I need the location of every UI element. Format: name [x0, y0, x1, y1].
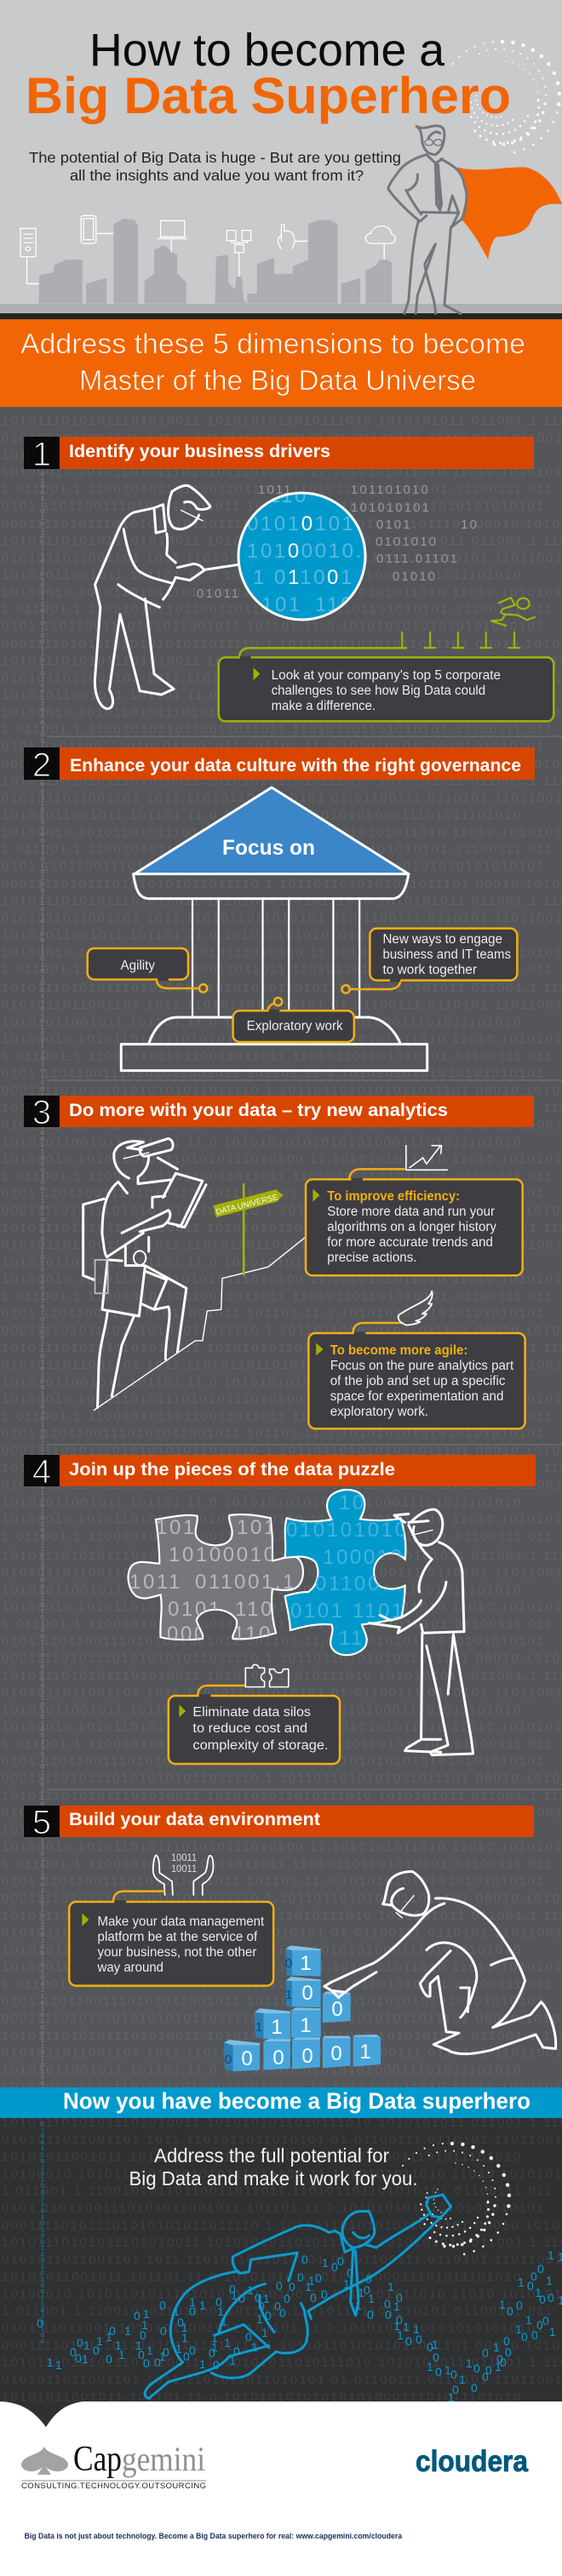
closing text: Big Data and make it work for you. — [129, 2167, 417, 2190]
binary data texture: 0101010 — [376, 535, 438, 549]
binary data texture: 01011 — [197, 587, 240, 601]
callout: improve efficiency — [306, 1146, 523, 1275]
callout: top 5 challenges — [219, 648, 553, 721]
callout: become more agile: exploratory work. — [330, 1405, 428, 1419]
callout: exploratory work: Exploratory work — [247, 1019, 343, 1033]
data blocks: 1 — [271, 2016, 283, 2039]
icon: data spiral at fist — [403, 2144, 509, 2255]
callout: become more agile: space for experimentation and — [330, 1389, 503, 1404]
callout: new ways to engage — [342, 929, 517, 993]
puzzle piece: grey: 011001.1 — [195, 1571, 296, 1594]
section 3 heading: Do more with your data – try new analytics — [69, 1101, 448, 1120]
section 5 heading: 5 — [32, 1804, 51, 1841]
puzzle piece: blue: 10 — [339, 1491, 366, 1514]
callout: become more agile — [308, 1291, 525, 1428]
temple diagram — [121, 787, 427, 1071]
binary data texture: 1011 — [258, 483, 293, 497]
callout: agility — [88, 948, 207, 993]
puzzle piece: grey: 1011 — [129, 1571, 182, 1594]
section 2 heading: Enhance your data culture with the right governance — [70, 756, 521, 776]
icon: hands with data — [153, 1852, 213, 1895]
intro text: The potential of Big Data is huge - But are you getting — [29, 149, 401, 166]
callout: become more agile: of the job and set up a specific — [330, 1374, 506, 1388]
logo: Cloudera: cloudera — [416, 2445, 528, 2478]
binary data texture — [0, 407, 562, 2087]
section 3 heading: 3 — [32, 1094, 51, 1131]
data blocks: 0 — [301, 2045, 313, 2068]
figure: man with magnifying glass — [95, 485, 238, 709]
data blocks: 1 — [359, 2041, 371, 2064]
section 2 heading — [24, 747, 535, 784]
data blocks: 0 — [331, 1998, 343, 2021]
puzzle piece: grey: 000 — [167, 1623, 208, 1646]
figure: hiker with binoculars — [83, 1138, 306, 1411]
icon: data universe signpost — [213, 1183, 284, 1275]
puzzle piece: grey: 10100010 — [169, 1543, 278, 1566]
section 1 heading: Identify your business drivers — [69, 442, 330, 461]
callout: improve efficiency: algorithms on a longer history — [327, 1220, 496, 1234]
puzzle piece: blue: 0101 — [290, 1600, 345, 1623]
logo: Capgemini: CONSULTING.TECHNOLOGY.OUTSOURCING — [21, 2482, 206, 2491]
binary data texture: 01010 — [393, 570, 437, 584]
binary data texture: 0101 — [376, 518, 412, 532]
puzzle piece: grey: 110 — [233, 1623, 272, 1646]
footer note: Big Data is not just about technology. Become a Big Data superhero for real: www.capgemini.com/cloudera — [25, 2532, 403, 2541]
puzzle piece: grey: 101 — [237, 1516, 278, 1539]
callout: data management platform: your business, not the other — [97, 1945, 256, 1960]
callout: become more agile: To become more agile: — [330, 1343, 467, 1358]
banner: address 5 dimensions: Address these 5 dimensions to become — [20, 328, 525, 359]
puzzle piece: blue: 1101 — [353, 1600, 405, 1623]
closing text — [129, 2144, 417, 2190]
callout: data management platform: platform be at the service of — [97, 1930, 258, 1944]
icon: data universe signpost: DATA UNIVERSE — [215, 1193, 279, 1217]
banner: address 5 dimensions — [0, 319, 562, 407]
section 5 heading — [24, 1804, 534, 1841]
callout: agility: Agility — [121, 959, 155, 973]
logo: Capgemini: gemini — [122, 2440, 205, 2478]
figure: kneeling man building blocks — [324, 1871, 556, 2054]
banner: address 5 dimensions: Master of the Big Data Universe — [79, 364, 476, 396]
section 4 heading: 4 — [32, 1453, 51, 1491]
magnifying glass over data: 101 — [261, 593, 302, 616]
callout: top 5 challenges: Look at your company's top 5 corporate — [272, 668, 501, 683]
intro text — [29, 149, 401, 184]
puzzle piece: blue: 01100 — [315, 1572, 381, 1595]
logo: Capgemini — [21, 2440, 206, 2491]
callout: exploratory work — [233, 998, 354, 1042]
callout: new ways to engage: New ways to engage — [383, 932, 502, 947]
callout: data management platform: way around — [97, 1961, 163, 1975]
callout: eliminate data silos: to reduce cost and — [192, 1721, 307, 1736]
callout: top 5 challenges: make a difference. — [272, 699, 376, 713]
callout: improve efficiency: precise actions. — [327, 1251, 417, 1265]
data blocks: 1 — [255, 2020, 262, 2035]
puzzle piece: grey — [129, 1514, 303, 1646]
section 5 heading: Build your data environment — [69, 1810, 320, 1829]
callout: new ways to engage: to work together — [383, 963, 477, 977]
logo: Capgemini: Cap — [73, 2440, 122, 2479]
panel: hero header — [0, 0, 562, 319]
icon: hurdler — [402, 598, 535, 648]
callout: new ways to engage: business and IT teams — [383, 947, 511, 962]
magnifying glass over data: 110 — [315, 593, 354, 616]
callout: top 5 challenges: challenges to see how Big Data could — [272, 684, 485, 698]
binary data texture: 101010101 — [351, 501, 431, 515]
data blocks: 1 — [300, 1952, 312, 1975]
title: How to become a — [89, 25, 445, 76]
binary data texture: 101101010 — [351, 483, 430, 497]
section 3 heading — [24, 1094, 534, 1131]
device icons — [20, 215, 395, 283]
data blocks: 0 — [272, 2046, 284, 2069]
callout: data management platform: Make your data management — [97, 1915, 265, 1929]
magnifying glass over data: 011001 — [274, 566, 354, 589]
icon: Capgemini spade — [21, 2447, 68, 2475]
panel: closing dark section — [0, 2118, 562, 2427]
figure: man holding puzzle piece — [370, 1509, 473, 1755]
intro text: all the insights and value you want from it? — [70, 167, 364, 184]
icon: data spiral — [453, 42, 559, 153]
section 1 heading: 1 — [32, 436, 51, 473]
magnifying glass over data: 0110 — [255, 484, 308, 507]
magnifying glass over data: 10100010. — [247, 540, 364, 563]
callout: eliminate data silos — [169, 1664, 340, 1764]
callout: become more agile: Focus on the pure analytics part — [330, 1359, 514, 1373]
data blocks: 1 — [285, 1988, 292, 2002]
magnifying glass over data — [238, 484, 365, 620]
callout: data management platform — [69, 1892, 273, 1986]
puzzle piece: blue: 100010 — [323, 1546, 404, 1569]
data blocks: 0 — [225, 2052, 232, 2067]
closing text: Address the full potential for — [154, 2144, 389, 2167]
data blocks: 1 — [300, 2014, 312, 2037]
data blocks — [224, 1945, 381, 2071]
icon: businessman figure — [388, 126, 467, 313]
magnifying glass over data: 1 — [253, 566, 267, 589]
banner: now you have become a superhero: Now you have become a Big Data superhero — [63, 2088, 530, 2114]
binary data texture: 10 — [461, 518, 479, 532]
callout: improve efficiency: for more accurate trends and — [327, 1235, 493, 1250]
binary data texture: 0111.01101 — [376, 552, 459, 566]
puzzle piece: blue: 010101010 — [286, 1519, 409, 1542]
puzzle piece: blue — [285, 1490, 409, 1655]
puzzle piece: blue: 11 — [339, 1627, 364, 1650]
callout: eliminate data silos: complexity of storage. — [192, 1738, 329, 1753]
figure: flying superhero — [145, 2195, 450, 2399]
data blocks: 0 — [241, 2047, 253, 2070]
section 2 heading: 2 — [32, 747, 51, 784]
section 4 heading — [24, 1453, 536, 1491]
puzzle piece: grey: 101 — [156, 1516, 197, 1539]
temple heading: Focus on — [222, 836, 315, 860]
section 4 heading: Join up the pieces of the data puzzle — [69, 1460, 395, 1480]
title highlight: Big Data Superhero — [26, 67, 511, 124]
data blocks: 0 — [285, 1956, 292, 1971]
callout: improve efficiency: To improve efficiency: — [327, 1189, 460, 1204]
puzzle piece: grey: 0101 — [168, 1598, 222, 1621]
puzzle piece: grey: 110 — [235, 1598, 274, 1621]
icon: superhero cape — [457, 167, 562, 260]
callout: improve efficiency: Store more data and run your — [327, 1205, 495, 1219]
icon: hands with data: 10011 — [171, 1852, 197, 1863]
section 1 heading — [24, 436, 534, 473]
city skyline — [38, 219, 392, 304]
icon: hands with data: 10011 — [171, 1863, 197, 1875]
data blocks: 0 — [330, 2042, 342, 2065]
callout: eliminate data silos: Eliminate data silos — [192, 1705, 311, 1720]
magnifying glass over data: 01010101 — [247, 512, 356, 535]
data blocks: 0 — [301, 1982, 313, 2005]
